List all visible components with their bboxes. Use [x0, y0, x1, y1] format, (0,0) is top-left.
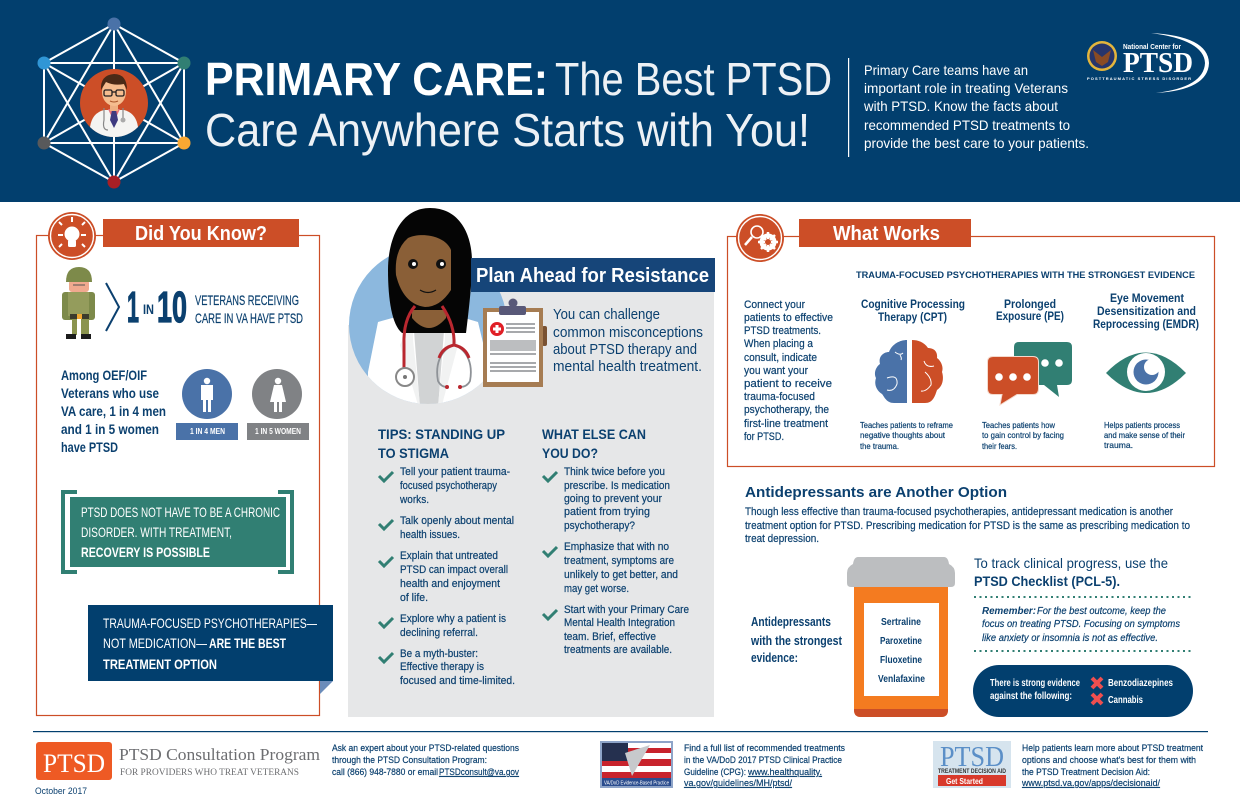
icon: pill bottle: Fluoxetine — [880, 654, 922, 666]
list: what else: Mental Health Integration — [564, 617, 675, 629]
icon: eye — [1106, 352, 1186, 393]
list: what else: prescribe. Is medication — [564, 480, 670, 492]
icon: brain — [875, 340, 943, 403]
callout: best treatment option — [88, 605, 333, 694]
callout: evidence against: Cannabis — [1108, 695, 1143, 706]
footer: clinical practice guideline: www.healthquality. — [747, 767, 822, 778]
list: tips — [399, 466, 515, 687]
heading: Plan Ahead for Resistance: Plan Ahead for Resistance — [476, 265, 709, 287]
footer: decision aid: www.ptsd.va.gov/apps/decisionaid/ — [1021, 778, 1160, 789]
callout: recovery is possible: DISORDER. WITH TREATMENT, — [81, 524, 232, 540]
icons: check marks — [379, 472, 557, 662]
subheading: strongest evidence: TRAUMA-FOCUSED PSYCHOTHERAPIES WITH THE STRONGEST EVIDENCE — [856, 270, 1195, 281]
text: connect your patients: trauma-focused — [744, 391, 815, 403]
footer: clinical practice guideline: va.gov/guidelines/MH/ptsd/ — [684, 778, 792, 789]
heading: what else can you do — [542, 426, 646, 461]
heading: antidepressants: Antidepressants are Another Option — [745, 484, 1007, 501]
list: tips: focused and time-limited. — [400, 675, 515, 687]
logo: PTSD consultation: PTSD — [43, 749, 105, 778]
text: antidepressants description: treat depression. — [745, 533, 819, 545]
list: tips: PTSD can impact overall — [400, 564, 508, 576]
label: strongest evidence: Antidepressants — [751, 614, 831, 629]
list: tips: health issues. — [400, 529, 460, 541]
text: antidepressants description: Though less effective than trauma-focused psychotherapies, antidepressant medication is another — [745, 506, 1173, 518]
text: connect your patients: When placing a — [744, 338, 814, 350]
text: connect your patients: psychotherapy, the — [744, 404, 829, 416]
heading: Did You Know? — [103, 219, 299, 247]
text: OEF/OIF statistic: Veterans who use — [61, 385, 159, 401]
header intro text: provide the best care to your patients. — [864, 135, 1089, 151]
list: tips: works. — [399, 494, 429, 506]
panel: What Works — [728, 214, 1214, 466]
list: what else: going to prevent your — [564, 493, 662, 505]
icon: 1 in 4 men — [176, 369, 238, 440]
column: PE: Prolonged — [1004, 299, 1056, 311]
list: what else: Start with your Primary Care — [564, 604, 689, 616]
text: OEF/OIF statistic: VA care, 1 in 4 men — [61, 403, 166, 419]
text: connect your patients: PTSD treatments. — [744, 325, 821, 337]
footer: clinical practice guideline — [600, 741, 845, 789]
heading: Plan Ahead for Resistance — [471, 258, 715, 292]
callout: recovery is possible: RECOVERY IS POSSIBLE — [81, 544, 210, 560]
column: EMDR: Eye Movement — [1110, 293, 1184, 305]
list: tips: declining referral. — [400, 627, 478, 639]
icon: magnifier and gear — [736, 214, 784, 262]
text: OEF/OIF statistic — [61, 367, 166, 455]
text: challenge misconceptions: about PTSD therapy and — [553, 342, 697, 358]
header intro text: with PTSD. Know the facts about — [863, 98, 1058, 114]
text: remember note: focus on treating PTSD. Focusing on symptoms — [982, 618, 1181, 630]
text: remember note: like anxiety or insomnia is not as effective. — [982, 632, 1158, 644]
list: what else: psychotherapy? — [564, 520, 635, 532]
column: EMDR — [1093, 293, 1199, 450]
logo: PTSD consultation — [36, 742, 112, 780]
column: EMDR: Desensitization and — [1097, 306, 1196, 318]
heading: tips standing up to stigma — [378, 426, 505, 461]
column: CPT: negative thoughts about — [860, 430, 946, 440]
text: challenge misconceptions: common misconceptions — [553, 325, 703, 341]
column: PE: their fears. — [982, 441, 1017, 451]
header intro text: recommended PTSD treatments to — [864, 117, 1070, 133]
label: strongest evidence: evidence: — [751, 650, 798, 665]
icon: soldier — [62, 267, 95, 339]
stat: 1 in 10 veterans — [127, 283, 303, 332]
list: tips: focused psychotherapy — [400, 480, 497, 492]
column: EMDR: and make sense of their — [1104, 430, 1185, 440]
list: tips: Explain that untreated — [400, 550, 498, 562]
list: what else: treatment, symptoms are — [564, 555, 674, 567]
icon: 1 in 5 women: 1 IN 5 WOMEN — [255, 427, 301, 436]
column: CPT — [860, 299, 965, 451]
text: OEF/OIF statistic: have PTSD — [61, 439, 118, 455]
icon: 1 in 5 women — [247, 369, 309, 440]
column: EMDR: Helps patients process — [1104, 420, 1180, 430]
column: EMDR: Reprocessing (EMDR) — [1093, 319, 1199, 331]
text: connect your patients: Connect your — [744, 299, 805, 311]
heading: What Works — [799, 219, 971, 247]
text: challenge misconceptions — [553, 307, 703, 375]
list: tips: Effective therapy is — [400, 661, 484, 673]
label: strongest evidence: with the strongest — [750, 633, 843, 648]
heading: tips standing up to stigma: TIPS: STANDING UP — [378, 426, 505, 442]
callout: evidence against: There is strong evidence — [990, 678, 1080, 689]
heading: tips standing up to stigma: TO STIGMA — [378, 445, 449, 461]
panel: Did You Know — [36, 212, 333, 716]
stat: 1 in 10 veterans: CARE IN VA HAVE PTSD — [195, 310, 303, 326]
footer: PTSD Consultation Program — [35, 742, 519, 797]
text: antidepressants description — [745, 506, 1190, 545]
section: antidepressants — [745, 484, 1194, 717]
stat: 1 in 10 veterans: 1 — [127, 283, 139, 332]
column: PE: Teaches patients how — [982, 420, 1056, 430]
list: what else: Emphasize that with no — [564, 541, 669, 553]
text: challenge misconceptions: You can challenge — [553, 307, 660, 323]
title: Care Anywhere Starts with You! — [205, 104, 810, 156]
heading: what else can you do: YOU DO? — [542, 445, 598, 461]
thumbnail: VA/DoD flag: VA/DoD Evidence-Based Practice — [604, 780, 669, 786]
text: connect your patients — [744, 299, 833, 443]
thumbnail: VA/DoD flag — [600, 741, 673, 788]
text: track clinical progress: To track clinical progress, use the — [974, 555, 1168, 571]
callout: best treatment option: NOT MEDICATION— — [103, 635, 207, 651]
heading: Did You Know?: Did You Know? — [135, 223, 267, 245]
text: connect your patients: patients to effective — [744, 312, 833, 324]
column: CPT: Therapy (CPT) — [878, 312, 947, 324]
text: remember note: Remember: — [982, 605, 1036, 617]
list: tips: Explore why a patient is — [400, 613, 506, 625]
footer: PTSD Consultation Program: Ask an expert about your PTSD-related questions — [332, 743, 519, 754]
footer: PTSD Consultation Program: PTSD Consultation Program — [119, 745, 320, 764]
logo: National Center for PTSD: POSTTRAUMATIC STRESS DISORDER — [1087, 76, 1191, 81]
label: strongest evidence — [750, 614, 843, 665]
icon: 1 in 4 men: 1 IN 4 MEN — [190, 427, 225, 436]
thumbnail: PTSD decision aid: PTSD — [940, 741, 1004, 773]
heading: What Works: What Works — [833, 223, 940, 245]
footer: clinical practice guideline: Guideline (CPG): — [684, 767, 746, 778]
title — [205, 53, 832, 156]
icon: pill bottle — [847, 557, 955, 717]
callout: best treatment option: ARE THE BEST — [209, 635, 286, 651]
panel: Plan Ahead for Resistance — [348, 208, 715, 717]
callout: evidence against: Benzodiazepines — [1108, 678, 1173, 689]
callout: best treatment option: TRAUMA-FOCUSED PSYCHOTHERAPIES— — [103, 615, 317, 631]
logo: National Center for PTSD: PTSD — [1123, 48, 1193, 79]
footer: decision aid: the PTSD Treatment Decision Aid: — [1022, 767, 1150, 778]
text: remember note: For the best outcome, keep the — [1037, 605, 1166, 617]
text: connect your patients: patient to receive — [744, 378, 832, 390]
stat: 1 in 10 veterans: 10 — [157, 283, 187, 332]
stat: 1 in 10 veterans: VETERANS RECEIVING — [195, 292, 299, 308]
list: tips: Talk openly about mental — [400, 515, 514, 527]
column: PE: to gain control by facing — [982, 430, 1064, 440]
thumbnail: PTSD decision aid: TREATMENT DECISION AID — [938, 769, 1007, 775]
list: what else — [564, 466, 689, 656]
footer: PTSD Consultation Program: PTSDconsult@va.gov — [439, 767, 519, 778]
footer: decision aid: options and choose what's best for them with — [1022, 755, 1196, 766]
logo: National Center for PTSD — [1087, 33, 1209, 93]
heading: what else can you do: WHAT ELSE CAN — [542, 426, 646, 442]
footer: PTSD Consultation Program: October 2017 — [35, 786, 87, 797]
footer: clinical practice guideline: in the VA/DoD 2017 PTSD Clinical Practice — [684, 755, 842, 766]
arrow: chevron — [106, 283, 119, 331]
text: remember note — [982, 605, 1181, 644]
footer: decision aid: Help patients learn more about PTSD treatment — [1022, 743, 1203, 754]
column: PE: Exposure (PE) — [996, 311, 1064, 323]
text: OEF/OIF statistic: Among OEF/OIF — [61, 367, 147, 383]
list: tips: health and enjoyment — [400, 578, 500, 590]
callout: recovery is possible: PTSD DOES NOT HAVE TO BE A CHRONIC — [81, 504, 280, 520]
title: PRIMARY CARE: — [205, 53, 548, 105]
header intro text — [863, 62, 1089, 151]
icon: speech bubbles — [988, 342, 1072, 405]
column: CPT: the trauma. — [860, 441, 899, 451]
text: antidepressants description: treatment option for PTSD. Prescribing medication for PTSD is the same as prescribing medication to — [745, 520, 1190, 532]
callout: evidence against — [973, 665, 1193, 717]
footer: PTSD Consultation Program: FOR PROVIDERS WHO TREAT VETERANS — [120, 768, 299, 778]
stat: 1 in 10 veterans: IN — [143, 301, 154, 317]
logo: National Center for PTSD: National Center for — [1123, 42, 1181, 51]
thumbnail: PTSD decision aid — [933, 741, 1011, 788]
icon: doctor illustration — [349, 208, 507, 410]
footer: decision aid — [933, 741, 1203, 789]
title: The Best PTSD — [555, 53, 832, 105]
thumbnail: PTSD decision aid: Get Started — [946, 777, 983, 786]
footer: clinical practice guideline: Find a full list of recommended treatments — [684, 743, 845, 754]
text: connect your patients: first-line treatment — [744, 418, 828, 430]
header intro text: important role in treating Veterans — [864, 80, 1068, 96]
list: what else: Think twice before you — [564, 466, 665, 478]
icon: care network with doctor — [38, 18, 190, 188]
list: what else: team. Brief, effective — [564, 631, 656, 643]
callout: best treatment option: TREATMENT OPTION — [103, 656, 217, 672]
list: tips: of life. — [400, 592, 428, 604]
text: connect your patients: you want your — [744, 365, 808, 377]
text: track clinical progress: PTSD Checklist (PCL-5). — [974, 573, 1120, 589]
header intro text: Primary Care teams have an — [864, 62, 1028, 78]
header banner — [0, 0, 1240, 202]
column: EMDR: trauma. — [1104, 440, 1133, 450]
text: OEF/OIF statistic: and 1 in 5 women — [61, 421, 159, 437]
list: what else: treatments are available. — [564, 644, 672, 656]
text: connect your patients: for PTSD. — [744, 431, 784, 443]
text: connect your patients: consult, indicate — [744, 352, 817, 364]
list: what else: patient from trying — [564, 506, 650, 518]
column: CPT: Cognitive Processing — [861, 299, 965, 311]
text: challenge misconceptions: mental health treatment. — [553, 359, 702, 375]
icon: pill bottle: Venlafaxine — [878, 673, 925, 685]
callout: evidence against: against the following: — [990, 691, 1072, 702]
footer: PTSD Consultation Program: through the PTSD Consultation Program: — [332, 755, 487, 766]
footer: PTSD Consultation Program: call (866) 948-7880 or email — [332, 767, 438, 778]
icon: pill bottle: Paroxetine — [880, 635, 922, 647]
icon: light bulb — [48, 212, 96, 260]
callout: recovery is possible — [63, 492, 292, 572]
column: CPT: Teaches patients to reframe — [860, 420, 953, 430]
list: tips: Be a myth-buster: — [400, 648, 478, 660]
list: tips: Tell your patient trauma- — [400, 466, 510, 478]
list: what else: unlikely to get better, and — [564, 569, 678, 581]
text: track clinical progress — [974, 555, 1168, 589]
list: what else: may get worse. — [564, 583, 629, 595]
icon: clipboard — [483, 298, 547, 387]
column: PE — [982, 299, 1072, 451]
icon: pill bottle: Sertraline — [881, 616, 921, 628]
